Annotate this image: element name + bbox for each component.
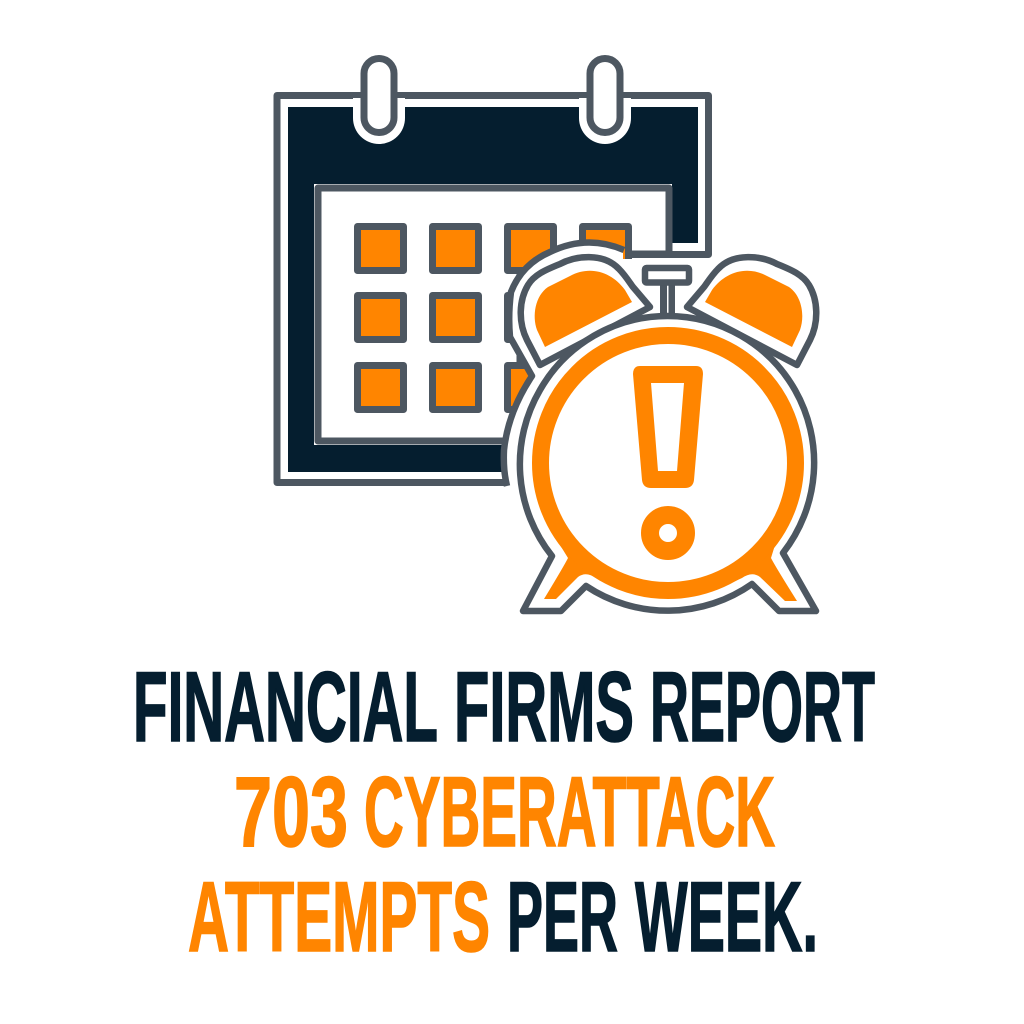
heading line 2: 703 <box>234 757 348 868</box>
calendar day squares <box>358 226 628 410</box>
icon: wall calendar <box>277 58 708 482</box>
heading line 2 <box>234 757 775 868</box>
binder ring left <box>353 58 405 144</box>
exclamation mark bar <box>633 366 703 488</box>
heading line 1: FINANCIAL <box>133 652 438 763</box>
heading line 3 dark: PER <box>507 862 618 973</box>
calendar dark backing <box>288 107 698 472</box>
binder ring right <box>579 58 631 144</box>
right bell <box>687 257 816 365</box>
heading line 3 dark: WEEK. <box>635 862 818 973</box>
exclamation mark dot <box>650 515 686 551</box>
clock halo cut-out <box>502 242 830 620</box>
heading <box>133 652 875 973</box>
clock top knob <box>645 268 689 282</box>
heading line 3 dark <box>507 862 818 973</box>
clock orange ring and white face <box>540 336 796 590</box>
heading line 1: FIRMS <box>454 652 634 763</box>
heading line 3 orange: ATTEMPTS <box>188 862 490 973</box>
left bell <box>521 257 650 365</box>
clock stem <box>660 284 675 318</box>
icon: alarm clock <box>520 257 816 611</box>
clock feet and body outline <box>520 316 816 611</box>
clock orange feet <box>544 545 797 601</box>
calendar inner page <box>318 188 669 441</box>
calendar outer outline <box>277 96 708 482</box>
